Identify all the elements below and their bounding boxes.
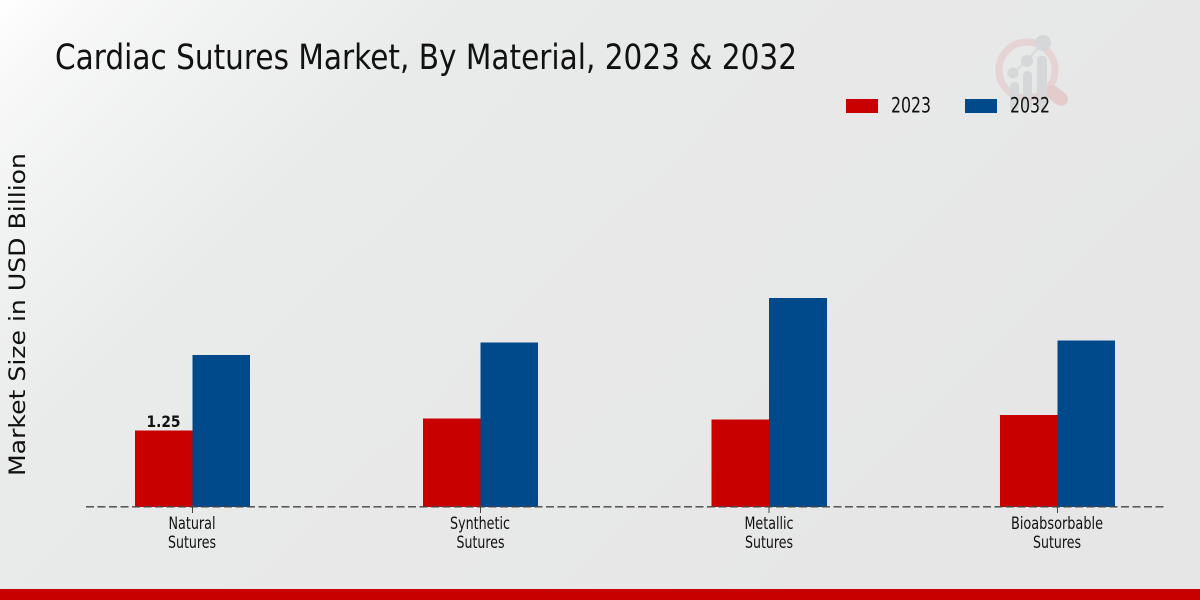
category label: Metallic Sutures: Metallic	[744, 514, 794, 533]
bars: Metallic Sutures	[712, 298, 827, 507]
bars: Bioabsorbable Sutures	[1000, 340, 1115, 507]
category label: Bioabsorbable Sutures	[1011, 514, 1103, 552]
category label: Metallic Sutures	[744, 514, 794, 552]
data label: 1.25: 1.25	[146, 412, 180, 431]
legend item: 2023: 2023	[891, 94, 931, 118]
category label: Synthetic Sutures	[450, 514, 510, 552]
icon: watermark logo	[999, 35, 1061, 110]
legend	[846, 94, 1050, 118]
title: Cardiac Sutures Market, By Material, 2023 & 2032	[55, 38, 797, 78]
category label: Natural Sutures: Sutures	[168, 533, 216, 552]
category label: Synthetic Sutures: Synthetic	[450, 514, 510, 533]
legend item: 2032: 2032	[1010, 94, 1050, 118]
y-axis label: Market Size in USD Billion	[5, 153, 31, 476]
legend item: 2032	[965, 94, 1050, 118]
bars: Natural Sutures	[135, 355, 250, 507]
category label: Bioabsorbable Sutures: Bioabsorbable	[1011, 514, 1103, 533]
footer bar	[0, 589, 1200, 600]
bar chart	[86, 298, 1164, 513]
category label: Bioabsorbable Sutures: Sutures	[1033, 533, 1081, 552]
x-axis baseline	[86, 506, 1164, 508]
category label: Synthetic Sutures: Sutures	[456, 533, 504, 552]
category label: Natural Sutures: Natural	[168, 514, 216, 533]
category label: Metallic Sutures: Sutures	[745, 533, 793, 552]
category label: Natural Sutures	[168, 514, 216, 552]
legend item: 2023	[846, 94, 931, 118]
bars: Synthetic Sutures	[423, 342, 538, 507]
